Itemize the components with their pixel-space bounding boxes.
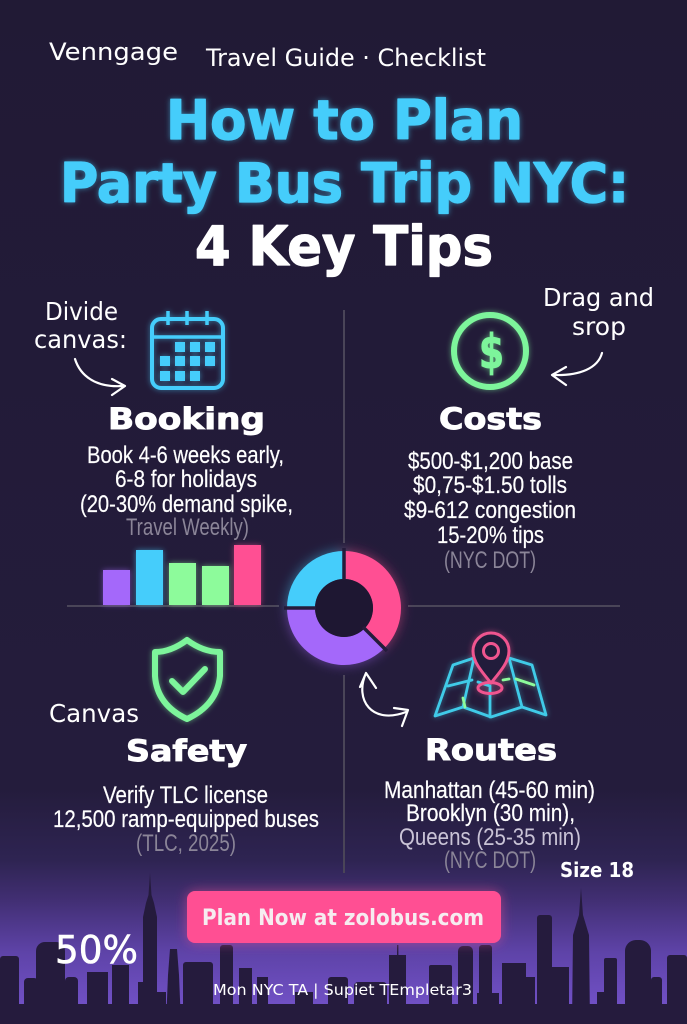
heading: Costs: Costs [439, 402, 542, 436]
title: How to Plan [166, 89, 523, 152]
annotation: Divide canvas: canvas: [34, 325, 127, 354]
donut chart [284, 548, 401, 665]
annotation: Drag and srop [543, 283, 654, 341]
title: 4 Key Tips [195, 215, 493, 278]
text: booking tips: (20-30% demand spike, [80, 491, 293, 518]
text: route times [384, 777, 595, 874]
panel: safety [53, 640, 319, 857]
text: booking tips: Book 4-6 weeks early, [87, 442, 284, 469]
annotation: Drag and srop: srop [572, 312, 626, 341]
text: booking tips [80, 442, 293, 541]
text: safety tips: (TLC, 2025) [136, 830, 236, 857]
tagline: Travel Guide · Checklist [205, 44, 486, 72]
icon: dollar coin [454, 315, 526, 387]
text: cost figures: (NYC DOT) [444, 547, 536, 574]
quadrant dividers [67, 310, 620, 873]
panel: costs [404, 315, 576, 574]
panel: routes [384, 633, 595, 874]
icon: shield with check [155, 640, 220, 719]
text: safety tips: Verify TLC license [103, 782, 268, 809]
heading: Booking: Booking [108, 402, 265, 436]
text: route times: Manhattan (45-60 min) [384, 777, 595, 804]
text: route times: Queens (25-35 min) [399, 824, 581, 851]
icon: dollar coin: $ [479, 325, 504, 380]
annotation: 50%: 50% [55, 928, 138, 972]
button: call to action [187, 891, 501, 943]
title [60, 89, 629, 278]
footer: Mon NYC TA | Supiet TEmpletar3 [213, 981, 472, 999]
panel: booking [80, 311, 293, 541]
skyline [0, 873, 687, 1024]
heading: Safety: Safety [126, 734, 247, 768]
text: route times: Brooklyn (30 min), [406, 800, 575, 827]
text: cost figures: $500-$1,200 base [408, 448, 573, 475]
annotation: Divide canvas: Divide [45, 297, 118, 326]
icon: calendar [152, 311, 223, 388]
annotation: Size 18: Size 18 [560, 858, 634, 882]
text: safety tips: 12,500 ramp-equipped buses [53, 806, 319, 833]
bar chart [103, 545, 261, 605]
text: route times: (NYC DOT) [444, 847, 536, 874]
text: cost figures: $0,75-$1.50 tolls [413, 472, 567, 499]
text: booking tips: Travel Weekly) [126, 514, 249, 541]
text: cost figures: $9-612 congestion [404, 497, 576, 524]
text: cost figures: 15-20% tips [437, 522, 544, 549]
button: call to action: Plan Now at zolobus.com [202, 906, 484, 931]
annotation: Drag and srop: Drag and [543, 283, 654, 312]
logo: Venngage: Venngage [49, 38, 178, 66]
text: booking tips: 6-8 for holidays [115, 466, 257, 493]
annotation: Canvas: Canvas [49, 699, 139, 728]
arrow: curved double arrow [360, 673, 408, 726]
annotation: Divide canvas [34, 297, 127, 354]
text: cost figures [404, 448, 576, 574]
title: Party Bus Trip NYC: [60, 152, 629, 215]
arrow: Drag and srop to coin [552, 353, 602, 385]
icon: map with pin [435, 633, 546, 717]
heading: Routes: Routes [425, 733, 557, 767]
text: safety tips [53, 782, 319, 857]
arrow: Divide canvas to calendar [75, 359, 125, 395]
